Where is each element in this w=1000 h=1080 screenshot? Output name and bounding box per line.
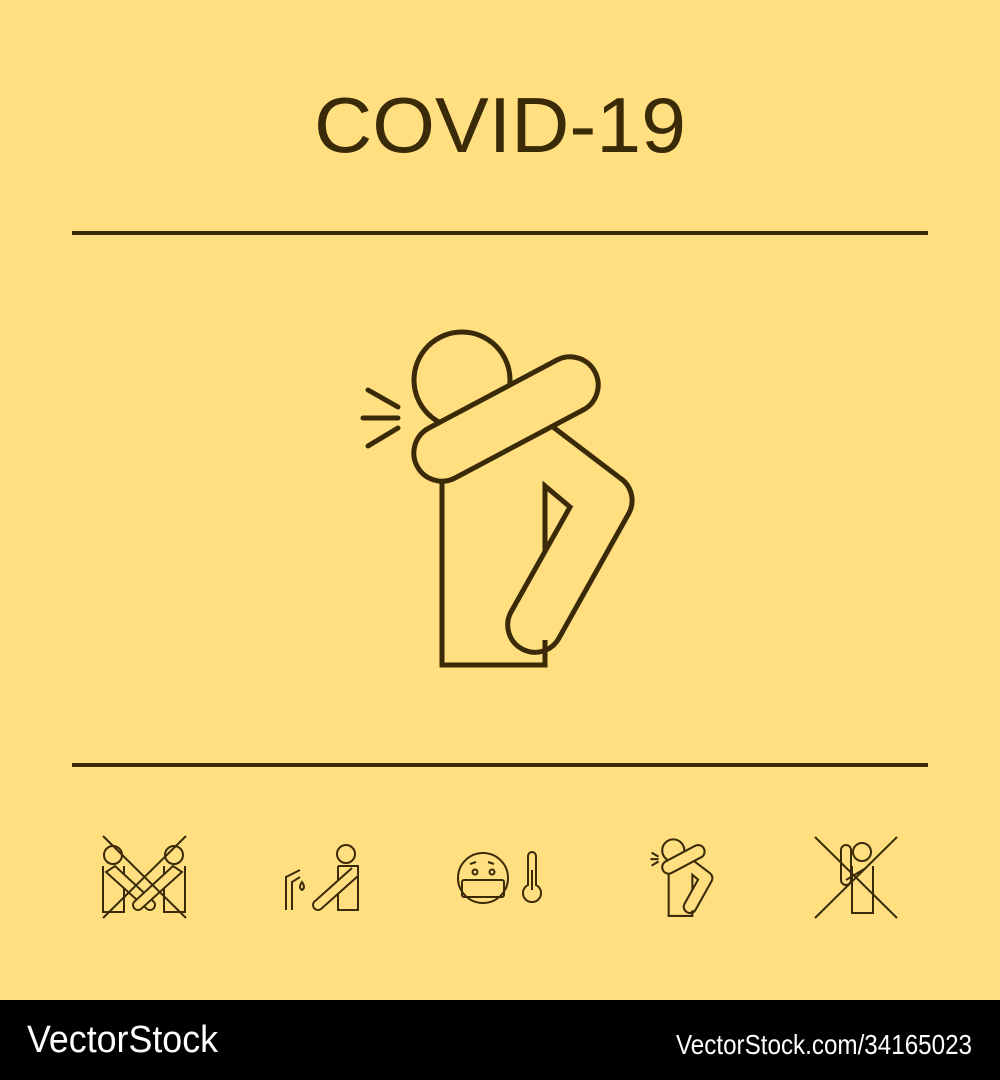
main illustration: person sneezing into elbow bbox=[363, 332, 632, 665]
icon: no touching face bbox=[815, 837, 897, 918]
sneeze lines bbox=[363, 390, 398, 446]
icon: washing hands bbox=[286, 845, 358, 910]
icon: sneeze into elbow small bbox=[650, 839, 712, 916]
body bbox=[442, 478, 545, 665]
footer bar: VectorStock bbox=[27, 1019, 219, 1061]
title: COVID-19 bbox=[314, 81, 686, 169]
head bbox=[414, 332, 510, 428]
icon: mask and thermometer bbox=[458, 852, 541, 903]
forearm covering face bbox=[414, 357, 598, 481]
footer bar bbox=[0, 1000, 1000, 1080]
icon: no hugging bbox=[103, 836, 186, 918]
upper arm and lower arm bbox=[508, 427, 632, 652]
